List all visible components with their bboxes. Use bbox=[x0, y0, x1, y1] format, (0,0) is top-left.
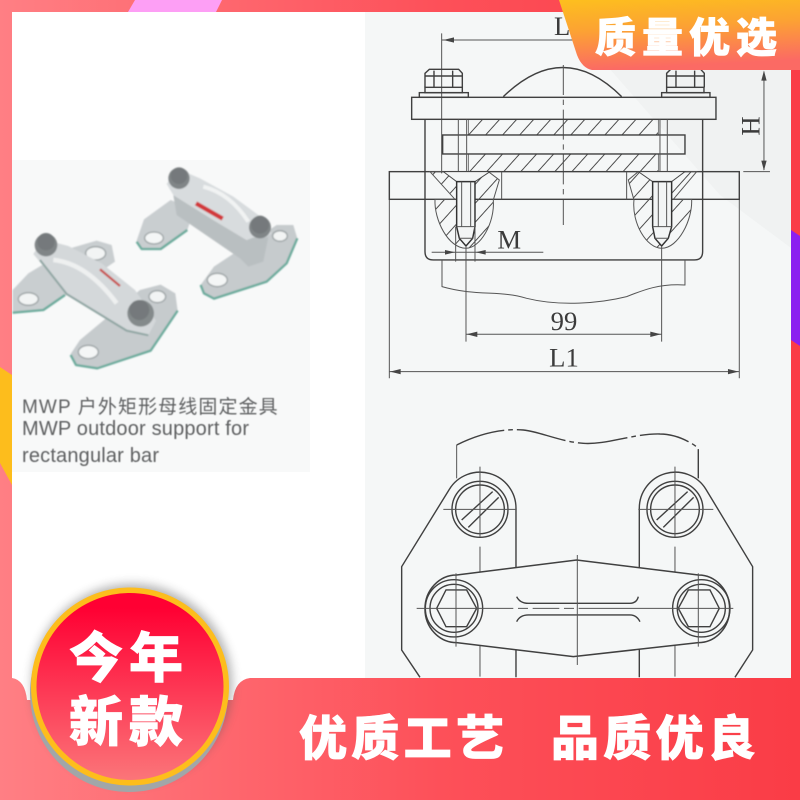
accent: purple right strip bbox=[791, 230, 800, 346]
badge: new this year bbox=[30, 584, 232, 792]
hatched bars bbox=[468, 119, 658, 172]
dimension 99 bbox=[466, 246, 662, 342]
right slotted bolt bbox=[638, 467, 713, 677]
accent: yellow left strip bbox=[0, 367, 12, 485]
product photo: clamp brackets bbox=[13, 167, 297, 368]
banner: top right bbox=[559, 0, 800, 70]
badge text line 2: 新款 bbox=[69, 693, 189, 753]
clamp bar outline bbox=[425, 560, 730, 657]
caption bbox=[22, 396, 279, 467]
badge text line 1: 今年 bbox=[69, 629, 189, 689]
dimension M bbox=[432, 224, 543, 262]
dimension H bbox=[735, 71, 770, 172]
left bracket bbox=[13, 233, 178, 368]
dimension L bbox=[442, 11, 577, 173]
plates bbox=[389, 97, 739, 260]
panel: technical drawings bbox=[365, 11, 791, 678]
bottom slogan bbox=[299, 713, 760, 766]
dimension 99: 99 bbox=[551, 306, 577, 336]
right bracket bbox=[137, 167, 297, 299]
dimension M: M bbox=[497, 224, 521, 254]
broken outline top bbox=[457, 430, 698, 478]
dimension L: L bbox=[554, 11, 570, 41]
left slotted bolt bbox=[443, 467, 517, 677]
caption: MWP 户外矩形母线固定金具 bbox=[22, 396, 279, 418]
dimension L1 bbox=[389, 200, 739, 378]
caption: rectangular bar bbox=[22, 445, 159, 467]
base plate outline bbox=[402, 472, 753, 677]
panel: product photo bbox=[12, 160, 310, 472]
drawing: side section view bbox=[389, 11, 770, 378]
accent: pink top tab bbox=[128, 0, 222, 12]
dome and centre line bbox=[503, 65, 622, 225]
slogan: craft: 优质工艺 bbox=[299, 713, 508, 766]
clamp centre marks bbox=[417, 555, 733, 665]
right hex bolt bbox=[673, 573, 730, 647]
slogan: quality: 品质优良 bbox=[551, 713, 760, 766]
nuts and washers bbox=[419, 69, 710, 97]
caption: MWP outdoor support for bbox=[22, 418, 249, 440]
dimension L1: L1 bbox=[549, 343, 579, 373]
banner heading: 质量优选 bbox=[595, 15, 783, 61]
drawing: plan view bbox=[402, 430, 753, 677]
broken lower outline bbox=[442, 260, 685, 303]
hatched blobs and threaded holes bbox=[430, 172, 697, 248]
dimension H: H bbox=[735, 116, 765, 136]
left hex bolt bbox=[425, 573, 483, 647]
